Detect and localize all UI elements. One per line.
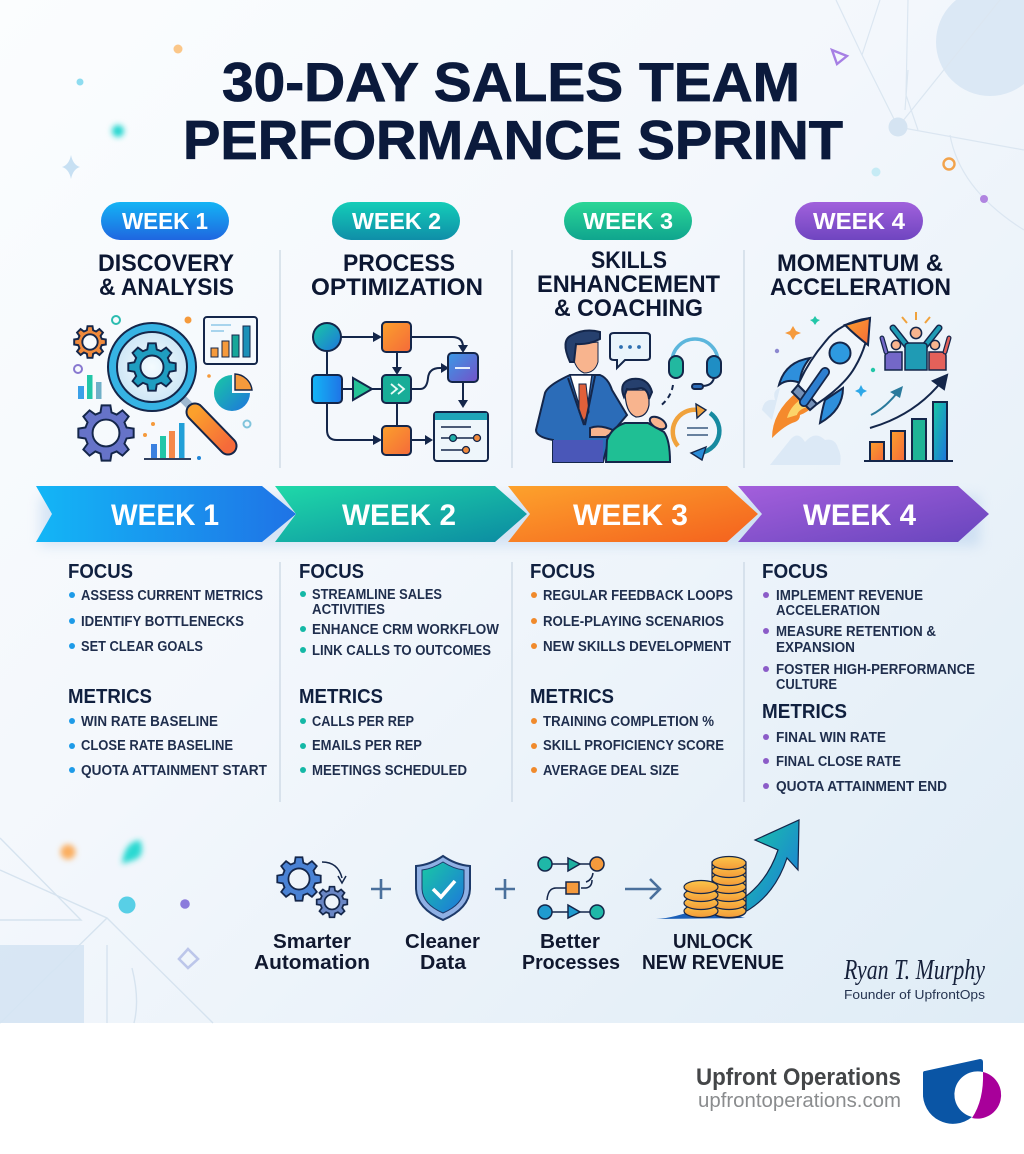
panel: week 1 heading	[98, 202, 234, 301]
footer brand text: upfrontoperations.com	[698, 1090, 901, 1112]
week 2 metrics list: CALLS PER REP	[312, 714, 414, 730]
panel: week 4 details	[762, 561, 975, 795]
bottom labels	[254, 931, 784, 974]
title: PERFORMANCE SPRINT	[183, 109, 843, 171]
panel: week 3 heading	[537, 202, 720, 322]
week 4 focus list: IMPLEMENT REVENUE	[776, 588, 923, 604]
week 2 chevron	[275, 486, 527, 542]
icon: plus sign one	[371, 879, 391, 899]
icon: coaching people and headset	[536, 331, 721, 462]
week 3 focus heading: FOCUS	[530, 561, 595, 583]
week 2 heading text	[311, 250, 483, 301]
week 2 metrics list: MEETINGS SCHEDULED	[312, 763, 467, 779]
week 4 metrics heading: METRICS	[762, 701, 847, 723]
panel: week 4 heading	[770, 202, 951, 301]
week 3 chevron	[508, 486, 758, 542]
week 1 focus list: IDENTIFY BOTTLENECKS	[81, 614, 244, 630]
label: unlock new revenue: NEW REVENUE	[642, 952, 784, 974]
week 4 pill	[795, 202, 923, 240]
icon: rocket and growth chart	[762, 312, 953, 465]
week 1 metrics list: QUOTA ATTAINMENT START	[81, 763, 267, 779]
label: smarter automation: Automation	[254, 952, 370, 974]
week 3 metrics list: AVERAGE DEAL SIZE	[543, 763, 679, 779]
icon: shield with check	[416, 856, 470, 920]
week 1 heading text: & ANALYSIS	[99, 274, 234, 301]
week 4 heading text: ACCELERATION	[770, 274, 951, 301]
label: cleaner data: Cleaner	[405, 931, 480, 953]
week 1 heading text: DISCOVERY	[98, 250, 234, 277]
week 3 focus list: NEW SKILLS DEVELOPMENT	[543, 639, 731, 655]
week 1 chevron	[36, 486, 296, 542]
label: better processes	[522, 931, 620, 974]
week 2 heading text: PROCESS	[343, 250, 455, 277]
week 2 metrics list: EMAILS PER REP	[312, 738, 422, 754]
week 2 focus list	[300, 587, 499, 659]
week 1 focus list: ASSESS CURRENT METRICS	[81, 588, 263, 604]
week 2 pill label: WEEK 2	[352, 208, 441, 234]
footer brand text	[696, 1064, 901, 1112]
week 3 metrics list: TRAINING COMPLETION %	[543, 714, 714, 730]
week 3 pill label: WEEK 3	[583, 208, 673, 234]
week 2 chevron: WEEK 2	[342, 499, 456, 532]
label: better processes: Better	[540, 931, 600, 953]
week 4 focus list: EXPANSION	[776, 640, 855, 656]
week 4 focus heading: FOCUS	[762, 561, 828, 583]
icon: discovery magnifier and analytics	[74, 316, 257, 461]
week 1 focus heading: FOCUS	[68, 561, 133, 583]
week 3 heading text: & COACHING	[554, 295, 703, 322]
week 3 metrics heading: METRICS	[530, 686, 614, 708]
week 1 chevron: WEEK 1	[111, 499, 219, 532]
week 1 metrics list: CLOSE RATE BASELINE	[81, 738, 233, 754]
week 2 metrics heading: METRICS	[299, 686, 383, 708]
week 4 metrics list: FINAL CLOSE RATE	[776, 754, 901, 770]
week 1 pill	[101, 202, 229, 240]
panel: week 1 details	[68, 561, 267, 779]
week 1 metrics heading: METRICS	[68, 686, 152, 708]
label: smarter automation	[254, 931, 370, 974]
label: unlock new revenue: UNLOCK	[673, 931, 754, 953]
banner shadow	[40, 496, 980, 546]
week 3 focus list: ROLE-PLAYING SCENARIOS	[543, 614, 724, 630]
week 1 metrics list: WIN RATE BASELINE	[81, 714, 218, 730]
icon: right arrow	[625, 879, 660, 899]
label: unlock new revenue	[642, 931, 784, 974]
icon: process flowchart	[312, 322, 488, 461]
column dividers upper	[280, 250, 744, 802]
week 3 metrics list	[531, 714, 724, 779]
week 1 metrics list	[69, 714, 267, 779]
panel: week 3 details	[530, 561, 733, 779]
week 1 heading text	[98, 250, 234, 301]
week 4 metrics list: QUOTA ATTAINMENT END	[776, 779, 947, 795]
week 2 focus list: STREAMLINE SALES	[312, 587, 442, 603]
title	[183, 51, 843, 171]
label: cleaner data: Data	[420, 952, 467, 974]
week 3 chevron: WEEK 3	[573, 499, 688, 532]
week 2 focus list: ENHANCE CRM WORKFLOW	[312, 622, 499, 638]
label: smarter automation: Smarter	[273, 931, 351, 953]
week 4 chevron: WEEK 4	[803, 499, 916, 532]
icon: plus sign two	[495, 879, 515, 899]
signature block	[843, 954, 986, 1002]
week 4 heading text	[770, 250, 951, 301]
week 3 pill	[564, 202, 692, 240]
icon: better processes flow	[538, 857, 604, 919]
week 3 focus list	[531, 588, 733, 655]
label: cleaner data	[405, 931, 480, 974]
week 3 heading text: ENHANCEMENT	[537, 271, 720, 298]
week 2 focus list: ACTIVITIES	[312, 602, 385, 618]
week 2 heading text: OPTIMIZATION	[311, 274, 483, 301]
week 4 focus list: FOSTER HIGH-PERFORMANCE	[776, 662, 975, 678]
week 3 focus list: REGULAR FEEDBACK LOOPS	[543, 588, 733, 604]
week 4 chevron	[738, 486, 989, 542]
icon: automation gears	[277, 857, 347, 917]
week 2 pill	[332, 202, 460, 240]
week 4 focus list	[763, 588, 975, 693]
footer brand text: Upfront Operations	[696, 1064, 901, 1091]
panel: week 2 heading	[311, 202, 483, 301]
logo	[923, 1059, 1001, 1124]
week 4 focus list: ACCELERATION	[776, 603, 880, 619]
week 4 metrics list: FINAL WIN RATE	[776, 730, 886, 746]
week 4 metrics list	[763, 730, 947, 795]
week 2 focus heading: FOCUS	[299, 561, 364, 583]
founder caption: Founder of UpfrontOps	[844, 987, 986, 1002]
week 2 metrics list	[300, 714, 467, 779]
week 4 pill label: WEEK 4	[813, 208, 905, 234]
week 1 focus list: SET CLEAR GOALS	[81, 639, 203, 655]
week 1 focus list	[69, 588, 263, 655]
panel: week 2 details	[299, 561, 499, 779]
timeline chevron banner	[36, 486, 989, 546]
week 4 heading text: MOMENTUM &	[777, 250, 943, 277]
week 3 heading text: SKILLS	[591, 247, 667, 274]
week 3 metrics list: SKILL PROFICIENCY SCORE	[543, 738, 724, 754]
label: better processes: Processes	[522, 952, 620, 974]
week 4 focus list: MEASURE RETENTION &	[776, 624, 936, 640]
week 1 pill label: WEEK 1	[122, 208, 208, 234]
week 3 heading text	[537, 247, 720, 322]
title: 30-DAY SALES TEAM	[222, 51, 800, 113]
icon: coins and growth arrow	[656, 820, 799, 919]
week 2 focus list: LINK CALLS TO OUTCOMES	[312, 643, 491, 659]
week 4 focus list: CULTURE	[776, 677, 837, 693]
